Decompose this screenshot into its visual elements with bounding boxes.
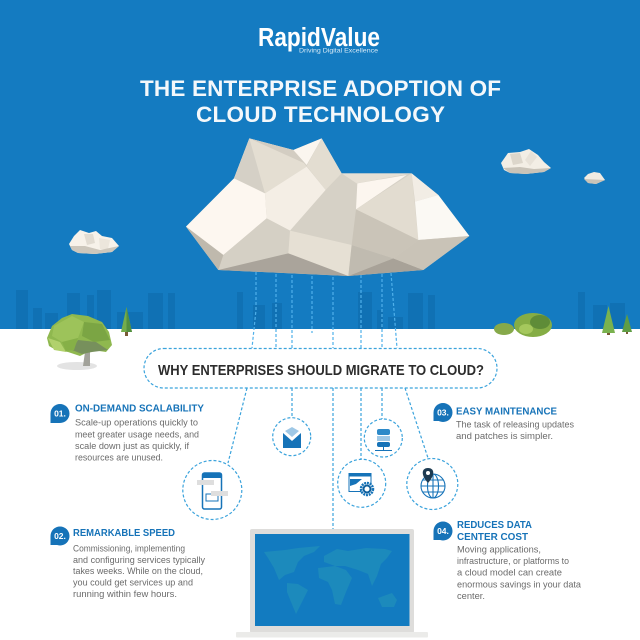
badge 02 <box>50 526 70 546</box>
section 04: reduces data center cost: infrastructure, or platforms to <box>457 556 569 567</box>
badge 03: 03. <box>437 408 449 418</box>
section 01: on-demand scalability: ON-DEMAND SCALABILITY <box>75 402 204 414</box>
large tree left <box>47 314 112 370</box>
section 02: remarkable speed: and configuring services typically <box>73 555 205 566</box>
main low-poly cloud <box>186 138 469 276</box>
badge 01: 01. <box>54 408 66 418</box>
section 01: on-demand scalability <box>50 402 204 464</box>
logo: Driving Digital Excellence <box>299 48 378 54</box>
logo: RapidValue <box>258 24 380 52</box>
section 01: on-demand scalability: Scale-up operations quickly to <box>75 418 198 428</box>
badge 02: 02. <box>54 531 66 541</box>
small cloud far right <box>584 172 605 184</box>
blue sky background <box>0 0 640 329</box>
icon: phone <box>183 460 242 520</box>
title <box>140 76 501 127</box>
icon: envelope <box>273 418 311 456</box>
section 02: remarkable speed: Commissioning, implementing <box>73 544 185 554</box>
pine trees right <box>602 306 632 335</box>
section 04: reduces data center cost <box>434 519 582 602</box>
bushes right <box>494 313 552 337</box>
section 04: reduces data center cost: a cloud model can create <box>457 568 562 578</box>
badge 04: 04. <box>437 526 449 536</box>
section 01: on-demand scalability: scale down just as quickly, if <box>75 441 189 452</box>
world map <box>264 546 397 614</box>
section 03: easy maintenance: EASY MAINTENANCE <box>456 406 557 418</box>
section 02: remarkable speed: you could get services up and <box>73 578 193 588</box>
section 03: easy maintenance <box>434 403 574 442</box>
section 04: reduces data center cost: enormous savings in your data <box>457 580 582 590</box>
question pill: WHY ENTERPRISES SHOULD MIGRATE TO CLOUD? <box>158 362 484 379</box>
small cloud left <box>69 230 119 254</box>
pine tree left <box>121 307 132 336</box>
title: THE ENTERPRISE ADOPTION OF <box>140 76 501 101</box>
dashed connectors from cloud to pill <box>252 272 397 348</box>
city skyline <box>16 290 625 329</box>
section 02: remarkable speed: REMARKABLE SPEED <box>73 527 175 539</box>
section 04: reduces data center cost: center. <box>457 591 485 602</box>
section 02: remarkable speed: takes weeks. While on the cloud, <box>73 566 203 577</box>
section 03: easy maintenance: and patches is simpler. <box>456 431 553 442</box>
section 03: easy maintenance: The task of releasing updates <box>456 420 574 430</box>
section 02: remarkable speed <box>50 526 205 600</box>
section 04: reduces data center cost: Moving applications, <box>457 544 541 556</box>
title: CLOUD TECHNOLOGY <box>196 102 445 127</box>
question pill <box>144 348 497 388</box>
badge 01 <box>50 404 70 423</box>
laptop with world map <box>236 529 428 638</box>
section 01: on-demand scalability: resources are unused. <box>75 452 163 464</box>
section 02: remarkable speed: running within few hours. <box>73 589 177 600</box>
icon: database server <box>364 419 402 457</box>
badge 04 <box>434 522 452 540</box>
white ground <box>0 329 640 640</box>
section 04: reduces data center cost: REDUCES DATA <box>457 519 532 531</box>
small cloud right <box>501 149 551 174</box>
badge 03 <box>434 403 452 422</box>
section 04: reduces data center cost: CENTER COST <box>457 531 529 543</box>
icon: globe with pin <box>407 458 458 510</box>
dashed connectors from pill to icons <box>228 388 428 530</box>
section 01: on-demand scalability: meet greater usage needs, and <box>75 430 199 440</box>
icon: browser and gear <box>338 459 386 507</box>
